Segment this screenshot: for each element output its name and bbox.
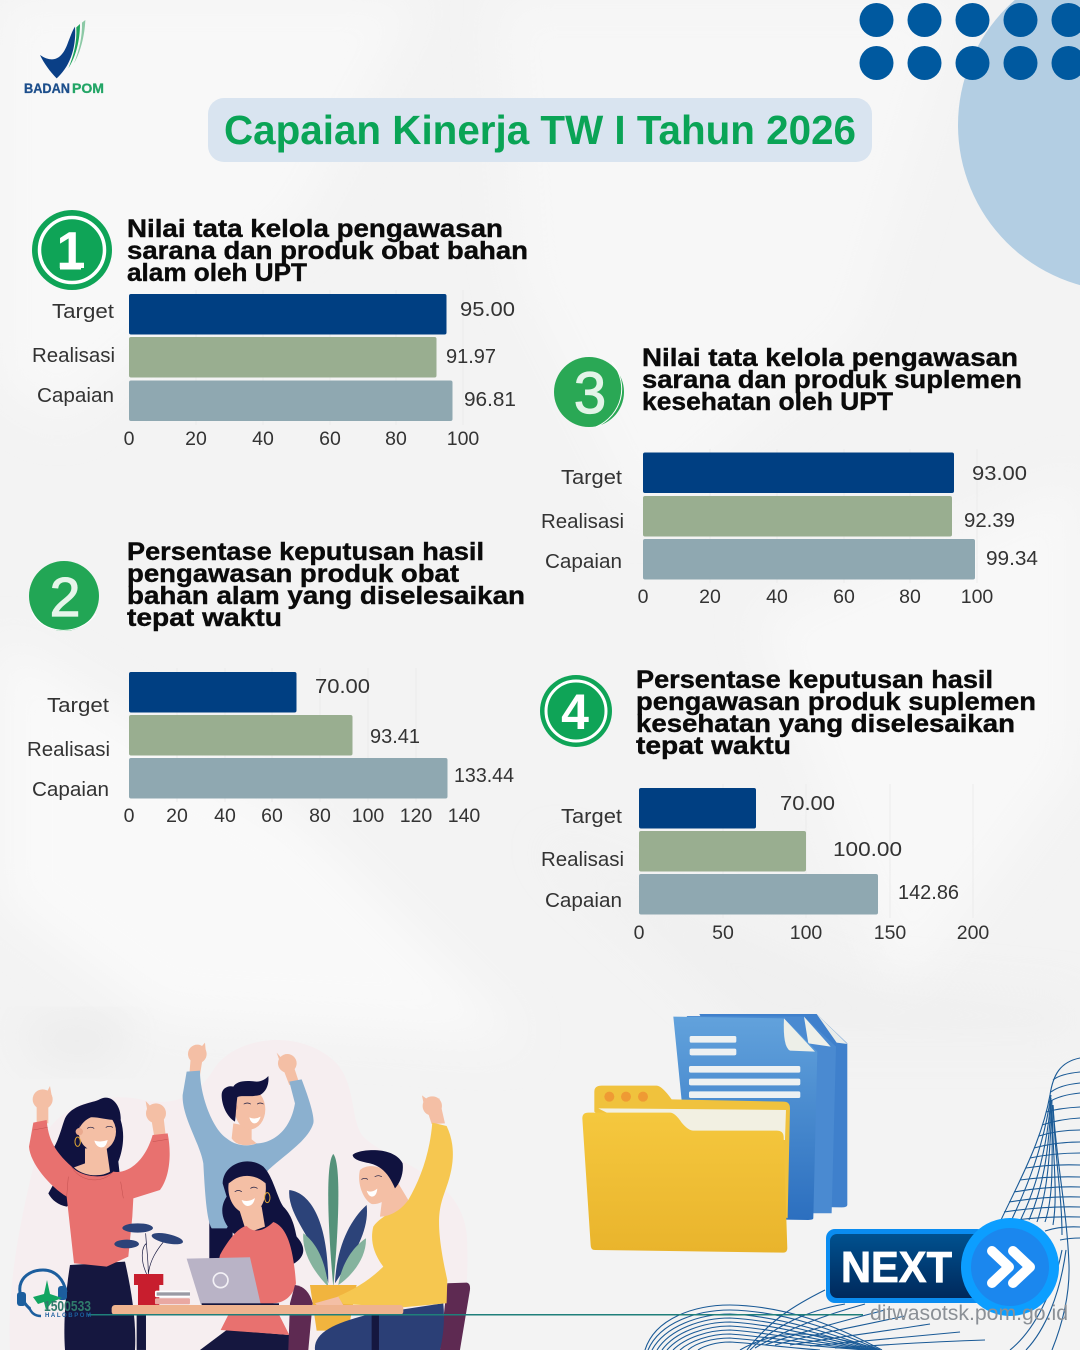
yellow folder xyxy=(582,1086,790,1253)
bar chart 1: 80 xyxy=(385,428,407,450)
title: Capaian Kinerja TW I Tahun 2026 xyxy=(224,107,856,153)
hotline logo: 1500533 xyxy=(44,1298,91,1315)
bar chart 2: 70.00 xyxy=(315,676,370,698)
bar chart 3: 40 xyxy=(766,586,788,608)
bar chart 3: 93.00 xyxy=(972,463,1027,485)
footer line xyxy=(88,1314,863,1316)
chairs xyxy=(288,1283,470,1350)
heading 2 xyxy=(127,538,525,632)
badge 1 xyxy=(32,210,112,290)
bar chart 4: 100.00 xyxy=(833,839,902,861)
heading 4: tepat waktu xyxy=(636,732,791,760)
bar chart 2: 80 xyxy=(309,805,331,827)
bar chart 4: Realisasi xyxy=(541,849,624,871)
person: man in yellow sweater xyxy=(315,1095,453,1350)
bar chart 3: 99.34 xyxy=(986,548,1038,570)
bar chart 3: 60 xyxy=(833,586,855,608)
bar chart 3: 92.39 xyxy=(964,510,1015,532)
hotline logo: HALOBPOM xyxy=(45,1313,91,1319)
badge 1: 1 xyxy=(57,222,85,280)
heading 3 xyxy=(642,344,1022,416)
heading 4: kesehatan yang diselesaikan xyxy=(636,710,1015,738)
logo: Badan POM: POM xyxy=(72,81,104,96)
large plant xyxy=(289,1154,367,1331)
dot grid xyxy=(860,3,1080,80)
heading 3: Nilai tata kelola pengawasan xyxy=(642,344,1018,372)
heading 2: pengawasan produk obat xyxy=(127,560,460,588)
bar chart 1: Target xyxy=(52,301,114,323)
badge 2: 2 xyxy=(50,566,80,628)
heading 2: bahan alam yang diselesaikan xyxy=(127,582,525,610)
bar chart 2: 20 xyxy=(166,805,188,827)
logo: Badan POM: BADAN xyxy=(24,81,70,96)
panel: indicator 1 xyxy=(32,210,528,450)
table xyxy=(112,1305,403,1350)
bar chart 4: 50 xyxy=(712,922,734,944)
bar chart 2: 100 xyxy=(352,805,384,827)
bar chart 1: 100 xyxy=(447,428,479,450)
bar chart 3: Realisasi xyxy=(541,511,624,533)
bar chart 1: 96.81 xyxy=(464,389,516,411)
bar chart 3: 20 xyxy=(699,586,721,608)
bar chart 4: 70.00 xyxy=(780,793,835,815)
books xyxy=(155,1291,190,1304)
heading 2: tepat waktu xyxy=(127,604,282,632)
badge 2 xyxy=(29,561,99,631)
person: woman at laptop xyxy=(200,1161,303,1350)
bar chart 4: 150 xyxy=(874,922,906,944)
bar chart 1: 0 xyxy=(124,428,135,450)
badge 4: 4 xyxy=(561,684,589,740)
bar chart 2: 140 xyxy=(448,805,480,827)
bar chart 3: 100 xyxy=(961,586,993,608)
bar chart 4: 100 xyxy=(790,922,822,944)
panel: indicator 4 xyxy=(540,666,1036,944)
bar chart 4: Target xyxy=(561,806,622,828)
heading 1 xyxy=(127,215,528,287)
bar chart 4: Capaian xyxy=(545,890,622,912)
person: man in blue sweater xyxy=(183,1043,314,1263)
heading 1: alam oleh UPT xyxy=(127,259,307,287)
badge 4 xyxy=(540,675,612,747)
badge 3: 3 xyxy=(574,361,606,426)
heading 3: sarana dan produk suplemen xyxy=(642,366,1022,394)
bar chart 1: 95.00 xyxy=(460,299,515,321)
bar chart 2: Capaian xyxy=(32,779,109,801)
bar chart 2: 40 xyxy=(214,805,236,827)
bar chart 1: 20 xyxy=(185,428,207,450)
bar chart 1: 91.97 xyxy=(446,346,496,368)
bar chart 1: 40 xyxy=(252,428,274,450)
bar chart 1: Capaian xyxy=(37,385,114,407)
panel: indicator 2 xyxy=(27,538,525,827)
next button: NEXT xyxy=(841,1243,952,1292)
bar chart 1: 60 xyxy=(319,428,341,450)
bar chart 3: Capaian xyxy=(545,551,622,573)
panel: indicator 3 xyxy=(541,344,1038,608)
heading 4: pengawasan produk suplemen xyxy=(636,688,1036,716)
bar chart 3 xyxy=(541,449,1038,608)
heading 1: Nilai tata kelola pengawasan xyxy=(127,215,503,243)
people illustration xyxy=(9,1040,470,1350)
bar chart 3: 80 xyxy=(899,586,921,608)
small potted plant xyxy=(114,1223,184,1305)
background blob xyxy=(9,1040,467,1350)
bar chart 2: 133.44 xyxy=(454,765,514,787)
bar chart 2: 0 xyxy=(124,805,135,827)
bar chart 4: 0 xyxy=(634,922,645,944)
bar chart 1: Realisasi xyxy=(32,345,115,367)
decorative circle xyxy=(958,0,1080,291)
bar chart 4 xyxy=(541,784,989,944)
badge 3 xyxy=(554,357,624,427)
bar chart 4: 142.86 xyxy=(898,882,959,904)
back documents xyxy=(673,1014,847,1220)
next button xyxy=(826,1218,1059,1316)
bar chart 2: Target xyxy=(47,695,109,717)
heading 1: sarana dan produk obat bahan xyxy=(127,237,528,265)
folder and documents illustration xyxy=(582,1014,847,1253)
heading 3: kesehatan oleh UPT xyxy=(642,388,893,416)
heading 4: Persentase keputusan hasil xyxy=(636,666,993,694)
hotline logo xyxy=(17,1270,91,1319)
person: woman in pink sweater xyxy=(29,1086,170,1350)
bar chart 2: Realisasi xyxy=(27,739,110,761)
logo: Badan POM xyxy=(24,20,104,96)
title xyxy=(208,98,872,162)
heading 2: Persentase keputusan hasil xyxy=(127,538,484,566)
bar chart 2: 60 xyxy=(261,805,283,827)
bar chart 1 xyxy=(32,290,516,450)
bar chart 3: 0 xyxy=(638,586,649,608)
bar chart 3: Target xyxy=(561,467,622,489)
heading 4 xyxy=(636,666,1036,760)
website url: ditwasotsk.pom.go.id xyxy=(870,1302,1068,1325)
bar chart 2 xyxy=(27,668,514,827)
wave mesh decoration xyxy=(645,1058,1080,1350)
bar chart 4: 200 xyxy=(957,922,989,944)
laptop xyxy=(187,1257,279,1305)
bar chart 2: 120 xyxy=(400,805,432,827)
bar chart 2: 93.41 xyxy=(370,726,420,748)
